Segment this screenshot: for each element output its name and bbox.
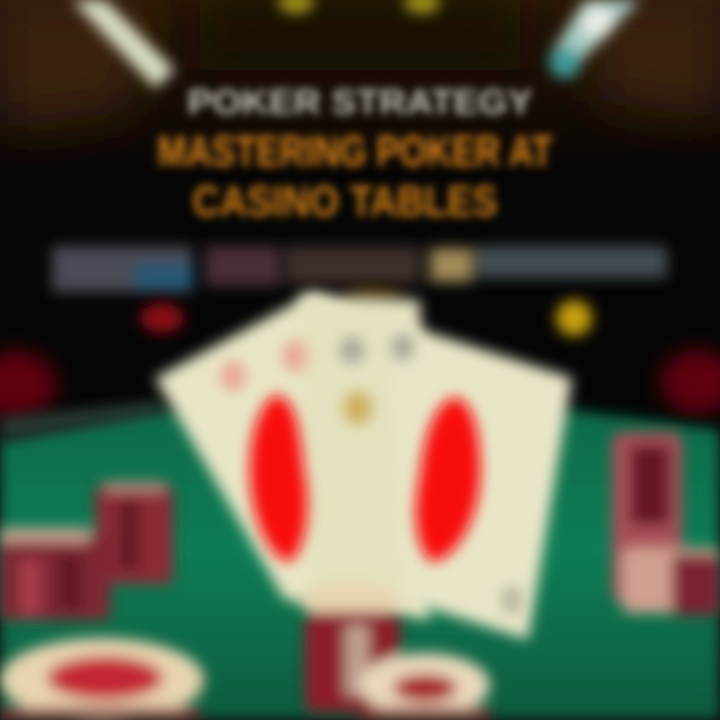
title block xyxy=(158,83,553,226)
heading line: white: POKER STRATEGY xyxy=(188,83,532,122)
playing cards xyxy=(155,292,572,640)
red suit left xyxy=(250,395,307,562)
red suit right xyxy=(416,397,480,562)
heading line: orange 2: CASINO TABLES xyxy=(192,177,498,226)
chip stack: left xyxy=(0,482,173,620)
pips xyxy=(220,333,523,615)
poker table xyxy=(0,402,720,720)
heading line: orange 1: MASTERING POKER AT xyxy=(158,127,553,176)
subtitle strip xyxy=(52,246,667,292)
centre card xyxy=(300,295,430,620)
small accent icons xyxy=(140,288,592,336)
left card xyxy=(155,292,400,610)
chip stack: bottom centre xyxy=(300,583,490,720)
red side glows xyxy=(0,350,720,419)
ceiling lights xyxy=(72,0,640,88)
chip stack: right xyxy=(612,432,720,615)
chip: bottom left xyxy=(0,638,204,720)
right card xyxy=(390,320,572,640)
